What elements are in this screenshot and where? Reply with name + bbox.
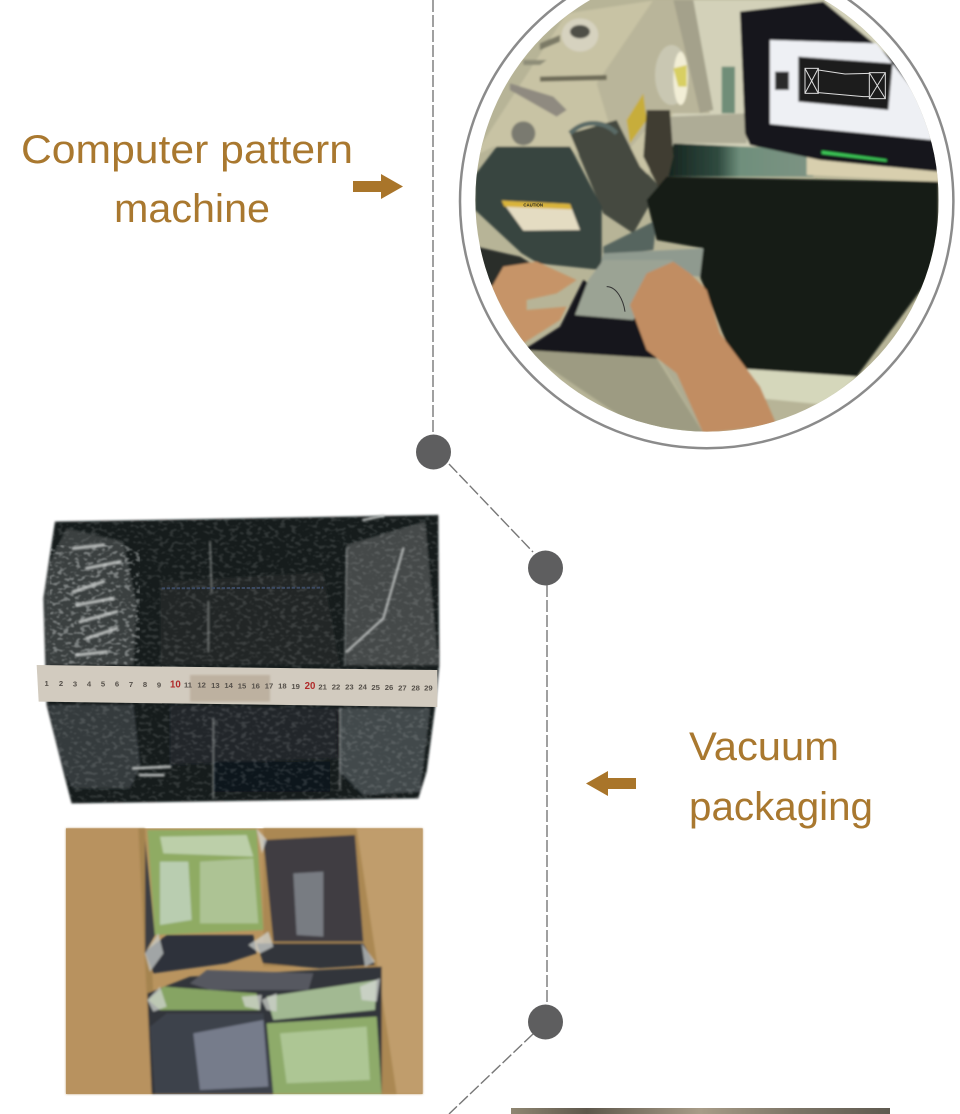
dark pack top — [263, 835, 363, 942]
side dark packs — [145, 935, 257, 973]
ruler numbers: 28 — [411, 683, 421, 692]
stitched seam — [162, 585, 323, 591]
plastic speckle texture — [40, 512, 443, 808]
ruler numbers: 5 — [101, 680, 106, 689]
ruler numbers: 11 — [184, 681, 193, 690]
vacuum bag — [43, 515, 439, 803]
timeline node 2 — [528, 550, 563, 586]
heading: computer pattern machine: machine — [114, 187, 270, 231]
ruler numbers: 23 — [345, 683, 354, 692]
caution label — [502, 201, 580, 231]
caution label text: CAUTION — [523, 203, 543, 208]
ruler numbers: 24 — [358, 683, 368, 692]
heading: vacuum packaging: Vacuum — [689, 725, 839, 769]
photo ring — [460, 0, 953, 448]
bag highlights — [73, 516, 403, 798]
ruler numbers: 9 — [157, 680, 161, 689]
screen pattern icons — [805, 68, 885, 99]
ruler numbers: 17 — [265, 682, 273, 691]
ruler numbers: 12 — [197, 681, 206, 690]
ruler numbers: 25 — [371, 683, 381, 692]
ruler numbers: 15 — [238, 681, 247, 690]
table front — [523, 350, 703, 433]
green side packs — [148, 987, 260, 1010]
ruler numbers: 21 — [318, 682, 328, 691]
upper background — [671, 0, 890, 148]
ruler numbers: 7 — [129, 680, 133, 689]
arrow: points left to packaging photos — [586, 771, 636, 796]
left table — [480, 246, 530, 287]
fabric — [575, 260, 673, 320]
plastic highlights — [145, 828, 380, 1012]
heading: computer pattern machine: Computer pattern — [21, 128, 353, 172]
ruler numbers: 10 — [170, 679, 181, 690]
heading: computer pattern machine — [21, 128, 353, 231]
ruler numbers: 2 — [59, 679, 63, 688]
clamp dark frame — [523, 280, 657, 358]
heading: vacuum packaging — [689, 725, 873, 829]
next section photo strip — [511, 1108, 890, 1114]
tubing and mechanism — [570, 120, 660, 233]
ruler numbers: 4 — [87, 679, 92, 688]
ruler numbers: 14 — [224, 681, 234, 690]
ruler numbers: 19 — [291, 682, 300, 691]
ruler numbers — [45, 679, 433, 693]
green pack top — [147, 829, 263, 935]
left hand — [490, 262, 577, 343]
timeline node 3 — [528, 1004, 563, 1040]
needle thread — [607, 287, 625, 312]
machine head — [475, 147, 602, 270]
ruler — [37, 665, 437, 707]
left sheen — [43, 528, 137, 665]
ruler numbers: 29 — [424, 684, 433, 693]
ruler numbers: 8 — [143, 680, 148, 689]
ruler numbers: 18 — [278, 682, 287, 691]
ruler numbers: 3 — [73, 679, 77, 688]
ruler numbers: 27 — [398, 683, 407, 692]
ruler numbers: 26 — [385, 683, 393, 692]
dashed timeline connector — [433, 0, 547, 1114]
photo: cardboard box with packed goods — [66, 828, 423, 1094]
ruler numbers: 22 — [332, 682, 340, 691]
cardboard box — [66, 828, 423, 1094]
timeline node 1 — [416, 434, 451, 470]
heading: vacuum packaging: packaging — [689, 785, 873, 829]
ruler numbers: 6 — [115, 680, 119, 689]
ruler numbers: 20 — [305, 681, 315, 692]
machine body — [480, 1, 673, 175]
right hand — [630, 262, 777, 433]
machine photo contents — [460, 0, 938, 437]
arrow: points right to machine photo — [353, 174, 403, 199]
lower dark pack — [150, 1013, 273, 1094]
photo: vacuum bag with ruler — [37, 512, 443, 808]
right sheen — [347, 522, 438, 665]
ruler numbers: 1 — [45, 679, 50, 688]
needle plate — [603, 220, 657, 257]
center mottling — [160, 572, 340, 665]
circular photo: sewing machine — [460, 0, 953, 448]
lower green pack — [267, 1017, 382, 1094]
ruler numbers: 16 — [251, 681, 260, 690]
dark mat — [647, 177, 938, 377]
monitor — [740, 2, 938, 172]
ruler numbers: 13 — [211, 681, 220, 690]
